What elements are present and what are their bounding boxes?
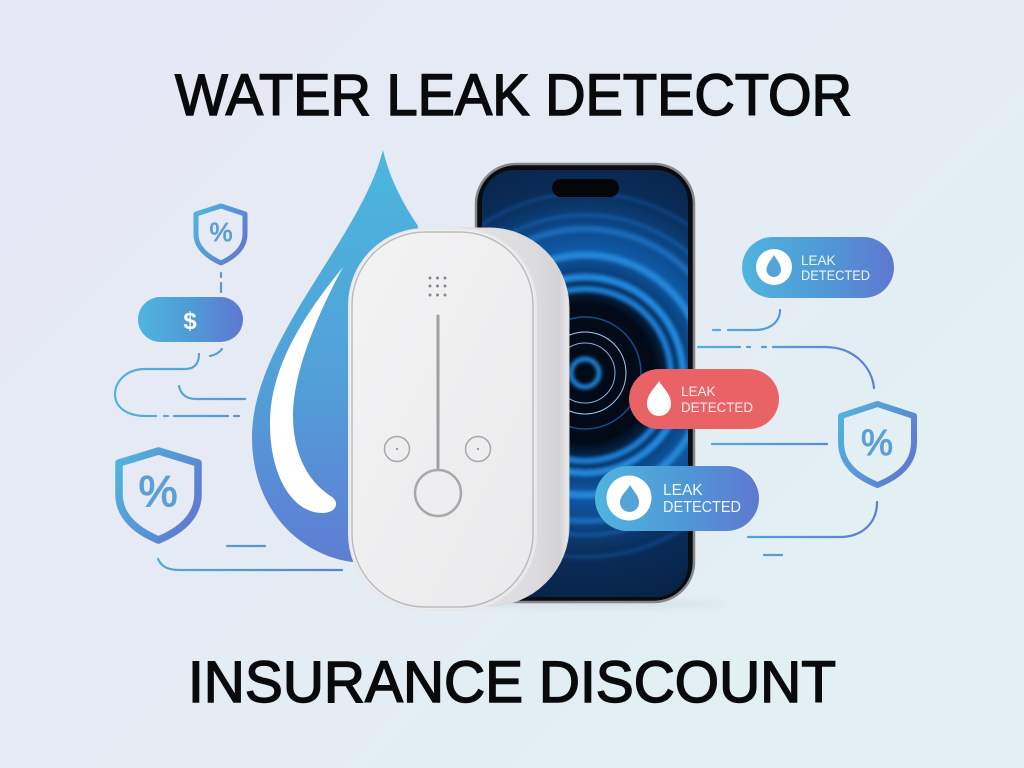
phone [474,162,696,607]
phone screen ripple [482,170,688,597]
alert pill: bottom blue [595,466,759,531]
dollar pill: $ [183,308,197,335]
alert pill: top blue: LEAK [801,253,836,268]
small shield with percent [196,206,245,263]
right shield with percent: % [861,422,893,463]
footer heading: INSURANCE DISCOUNT [188,650,836,715]
alert pill: red [629,369,779,429]
device side [380,228,569,606]
left button [384,436,410,462]
title: WATER LEAK DETECTOR [175,63,852,128]
alert pill: bottom blue: LEAK [663,482,703,499]
right button [466,436,490,462]
alert pill: top blue: DETECTED [801,268,870,283]
phone frame [476,164,694,602]
sensor slot [436,316,440,468]
large left shield with percent: % [138,467,178,516]
alert pill: red: LEAK [681,384,716,399]
main button [415,470,461,516]
water drop [252,150,430,562]
small shield with percent: % [209,217,233,247]
alert pill: red: DETECTED [681,400,753,415]
large left shield with percent [119,451,198,540]
right connector lines [698,310,877,555]
speaker dots [428,276,446,296]
device [349,228,569,610]
right shield with percent [841,404,914,485]
left connector lines [115,273,342,570]
drop highlight [270,267,343,513]
dollar pill [138,297,243,342]
device face [349,229,536,610]
phone notch [552,179,619,197]
alert pill: bottom blue: DETECTED [663,499,741,516]
alert pill: top blue [742,237,894,298]
